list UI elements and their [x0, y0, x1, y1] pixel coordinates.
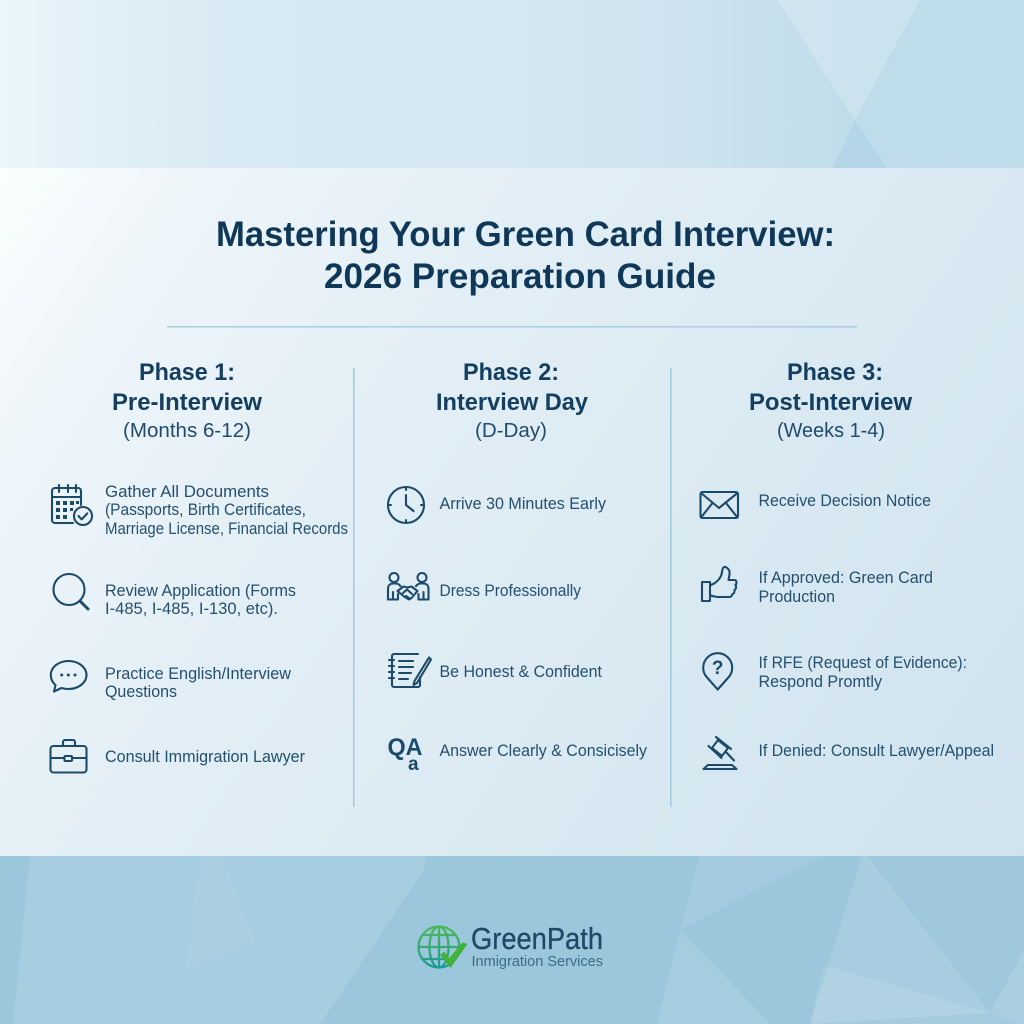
logo tagline: Inmigration Services: [472, 953, 603, 970]
panel: phase 3: [700, 359, 994, 769]
text: approved: Production: [758, 588, 835, 606]
icon: Q and A: [388, 734, 422, 775]
top decorative band: [0, 0, 1024, 168]
icon: handshake: [388, 573, 428, 600]
icon: briefcase: [50, 740, 86, 772]
phase 3 heading: (Weeks 1-4): [777, 419, 885, 442]
phase 3 heading: [749, 359, 912, 442]
text: arrive early: Arrive 30 Minutes Early: [440, 495, 607, 513]
icon: question pin: ?: [712, 658, 724, 679]
text: gather documents: Marriage License, Financial Records: [105, 520, 348, 538]
text: RFE: Respond Promtly: [758, 673, 883, 691]
phase 2 heading: [436, 359, 589, 442]
icon: question pin: [703, 653, 732, 690]
text: gather documents: (Passports, Birth Certificates,: [105, 501, 306, 519]
main panel: [0, 168, 1024, 856]
panel: phase 1: [50, 359, 348, 772]
phase 2 heading: Phase 2:: [463, 359, 559, 386]
text: receive notice: Receive Decision Notice: [758, 492, 931, 510]
logo: GreenPath: [418, 921, 603, 970]
icon: globe with check: [418, 926, 468, 968]
logo wordmark: GreenPath: [471, 921, 603, 956]
text: answer clearly: Answer Clearly & Consicisely: [440, 742, 648, 760]
icon: notebook and pen: [389, 654, 431, 687]
phase 1 heading: (Months 6-12): [123, 419, 251, 442]
text: review application: Review Application (Forms: [105, 582, 296, 600]
panel: phase 2: [388, 359, 648, 775]
icon: envelope: [700, 492, 738, 518]
phase 3 heading: Post-Interview: [749, 389, 912, 416]
bottom decorative band: [0, 852, 1024, 1024]
title: Mastering Your Green Card Interview:: [216, 214, 835, 254]
icon: Q and A: QA: [388, 734, 422, 761]
text: RFE: [758, 654, 967, 691]
text: dress professionally: Dress Professionally: [440, 582, 582, 600]
icon: calendar with check: [52, 485, 92, 525]
text: practice english: Questions: [105, 683, 177, 701]
text: review application: [105, 582, 296, 618]
phase 3 heading: Phase 3:: [787, 359, 883, 386]
text: practice english: Practice English/Interview: [105, 665, 291, 683]
phase 1 heading: Pre-Interview: [112, 389, 262, 416]
phase 2 heading: (D-Day): [475, 419, 547, 442]
icon: thumbs up: [702, 567, 736, 601]
phase 1 heading: Phase 1:: [139, 359, 235, 386]
text: approved: [758, 569, 933, 606]
text: RFE: If RFE (Request of Evidence):: [758, 654, 967, 672]
icon: magnifying glass: [54, 574, 88, 609]
icon: speech bubble: [51, 661, 86, 692]
text: gather documents: [105, 483, 348, 538]
icon: clock: [388, 487, 424, 523]
icon: Q and A: a: [408, 754, 419, 775]
text: consult lawyer: Consult Immigration Lawyer: [105, 748, 305, 766]
text: approved: If Approved: Green Card: [758, 569, 933, 587]
phase 2 heading: Interview Day: [436, 389, 589, 416]
icon: gavel: [704, 737, 736, 769]
text: review application: I-485, I-485, I-130, etc).: [105, 600, 278, 618]
text: be honest: Be Honest & Confident: [440, 663, 602, 681]
text: practice english: [105, 665, 291, 701]
title: 2026 Preparation Guide: [324, 256, 716, 296]
title: [216, 214, 835, 296]
text: denied: If Denied: Consult Lawyer/Appeal: [758, 742, 994, 760]
text: gather documents: Gather All Documents: [105, 483, 269, 501]
phase 1 heading: [112, 359, 262, 442]
